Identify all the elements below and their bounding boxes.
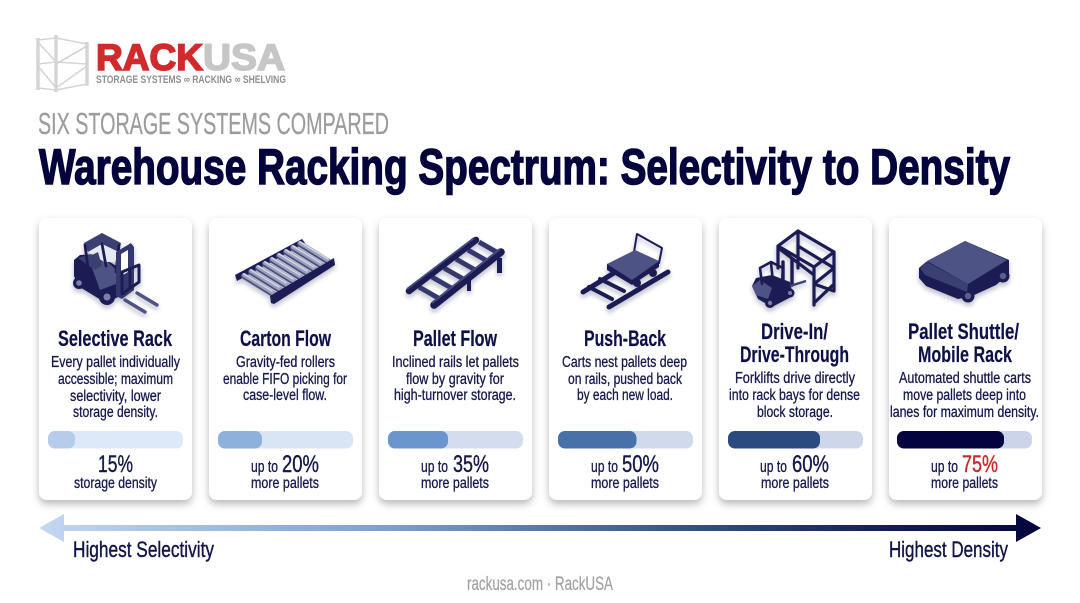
icon: shuttle cart [919, 241, 1010, 302]
heading: Mobile Rack [918, 342, 1012, 367]
icon: forklift entering rack [752, 231, 834, 308]
stat: more pallets [251, 475, 319, 492]
heading: Push-Back [584, 326, 666, 351]
icon: roller conveyor [235, 239, 335, 304]
description: Gravity-fed rollers [236, 354, 335, 371]
description: by each new load. [577, 387, 673, 404]
description: Carts nest pallets deep [562, 354, 687, 371]
logo: USA [203, 37, 285, 78]
label: highest selectivity: Highest Selectivity [73, 537, 215, 562]
stat: 75% [962, 451, 998, 478]
description: block storage. [757, 404, 833, 421]
heading: Selective Rack [58, 326, 172, 351]
description [51, 354, 180, 421]
stat: up to [251, 458, 278, 476]
description [562, 354, 687, 404]
description: Automated shuttle carts [899, 370, 1031, 387]
description: accessible; maximum [58, 371, 173, 388]
description [392, 354, 519, 404]
icon: push-back cart on rails [583, 234, 668, 307]
heading: Carton Flow [240, 326, 331, 351]
panel: pallet shuttle [889, 218, 1042, 500]
subtitle: SIX STORAGE SYSTEMS COMPARED [38, 107, 389, 141]
stat [251, 451, 319, 492]
stat [760, 451, 829, 492]
panel: pallet flow [379, 218, 532, 500]
label: highest density: Highest Density [889, 537, 1009, 562]
panel: push-back [549, 218, 702, 500]
stat: 50% [622, 451, 659, 478]
stat: 60% [792, 451, 829, 478]
description [890, 370, 1039, 421]
progress bar 35% [388, 431, 523, 448]
footer: rackusa.com · RackUSA [467, 573, 613, 595]
description: move pallets deep into [903, 387, 1026, 404]
description: high-turnover storage. [394, 387, 516, 404]
panel: drive-in [719, 218, 872, 500]
description: lanes for maximum density. [890, 404, 1039, 421]
description: case-level flow. [243, 387, 327, 404]
stat: up to [421, 458, 448, 476]
description [729, 370, 860, 421]
icon: rack frame [38, 35, 87, 92]
stat [931, 451, 998, 492]
stat: up to [591, 458, 618, 476]
heading: Pallet Flow [413, 326, 497, 351]
stat: more pallets [761, 475, 829, 492]
description: enable FIFO picking for [223, 371, 347, 388]
description: Every pallet individually [51, 354, 180, 371]
stat: 15% [98, 451, 133, 478]
stat: more pallets [421, 475, 489, 492]
arrow: selectivity to density spectrum [39, 514, 1041, 542]
stat: up to [760, 458, 787, 476]
description: flow by gravity for [406, 371, 504, 388]
icon: pallet flow rails [407, 238, 502, 305]
logo: STORAGE SYSTEMS ∞ RACKING ∞ SHELVING [96, 74, 286, 86]
progress bar 60% [728, 431, 863, 448]
heading [908, 319, 1020, 367]
panel: selective rack [39, 218, 192, 500]
description: Inclined rails let pallets [392, 354, 519, 371]
description: into rack bays for dense [729, 387, 860, 404]
stat: up to [931, 458, 958, 476]
logo [38, 35, 286, 92]
progress bar 15% [48, 431, 183, 448]
heading: Pallet Shuttle/ [908, 319, 1020, 344]
progress bar 75% [897, 431, 1032, 448]
stat: 20% [282, 451, 319, 478]
description: Forklifts drive directly [735, 370, 855, 387]
heading: Drive-In/ [761, 319, 829, 344]
panel: carton flow [209, 218, 362, 500]
stat [74, 451, 157, 492]
stat: more pallets [931, 475, 998, 492]
description: on rails, pushed back [568, 371, 682, 388]
logo wordmark: RACK [96, 37, 203, 78]
icon: forklift [73, 233, 157, 312]
stat: storage density [74, 475, 157, 492]
heading [740, 319, 849, 367]
stat [591, 451, 659, 492]
description: storage density. [73, 404, 158, 421]
heading: Drive-Through [740, 342, 849, 367]
stat: more pallets [591, 475, 659, 492]
progress bar 50% [558, 431, 693, 448]
progress bar 20% [218, 431, 353, 448]
stat: 35% [453, 451, 489, 478]
description [223, 354, 347, 404]
stat [421, 451, 489, 492]
description: selectivity, lower [70, 388, 161, 405]
